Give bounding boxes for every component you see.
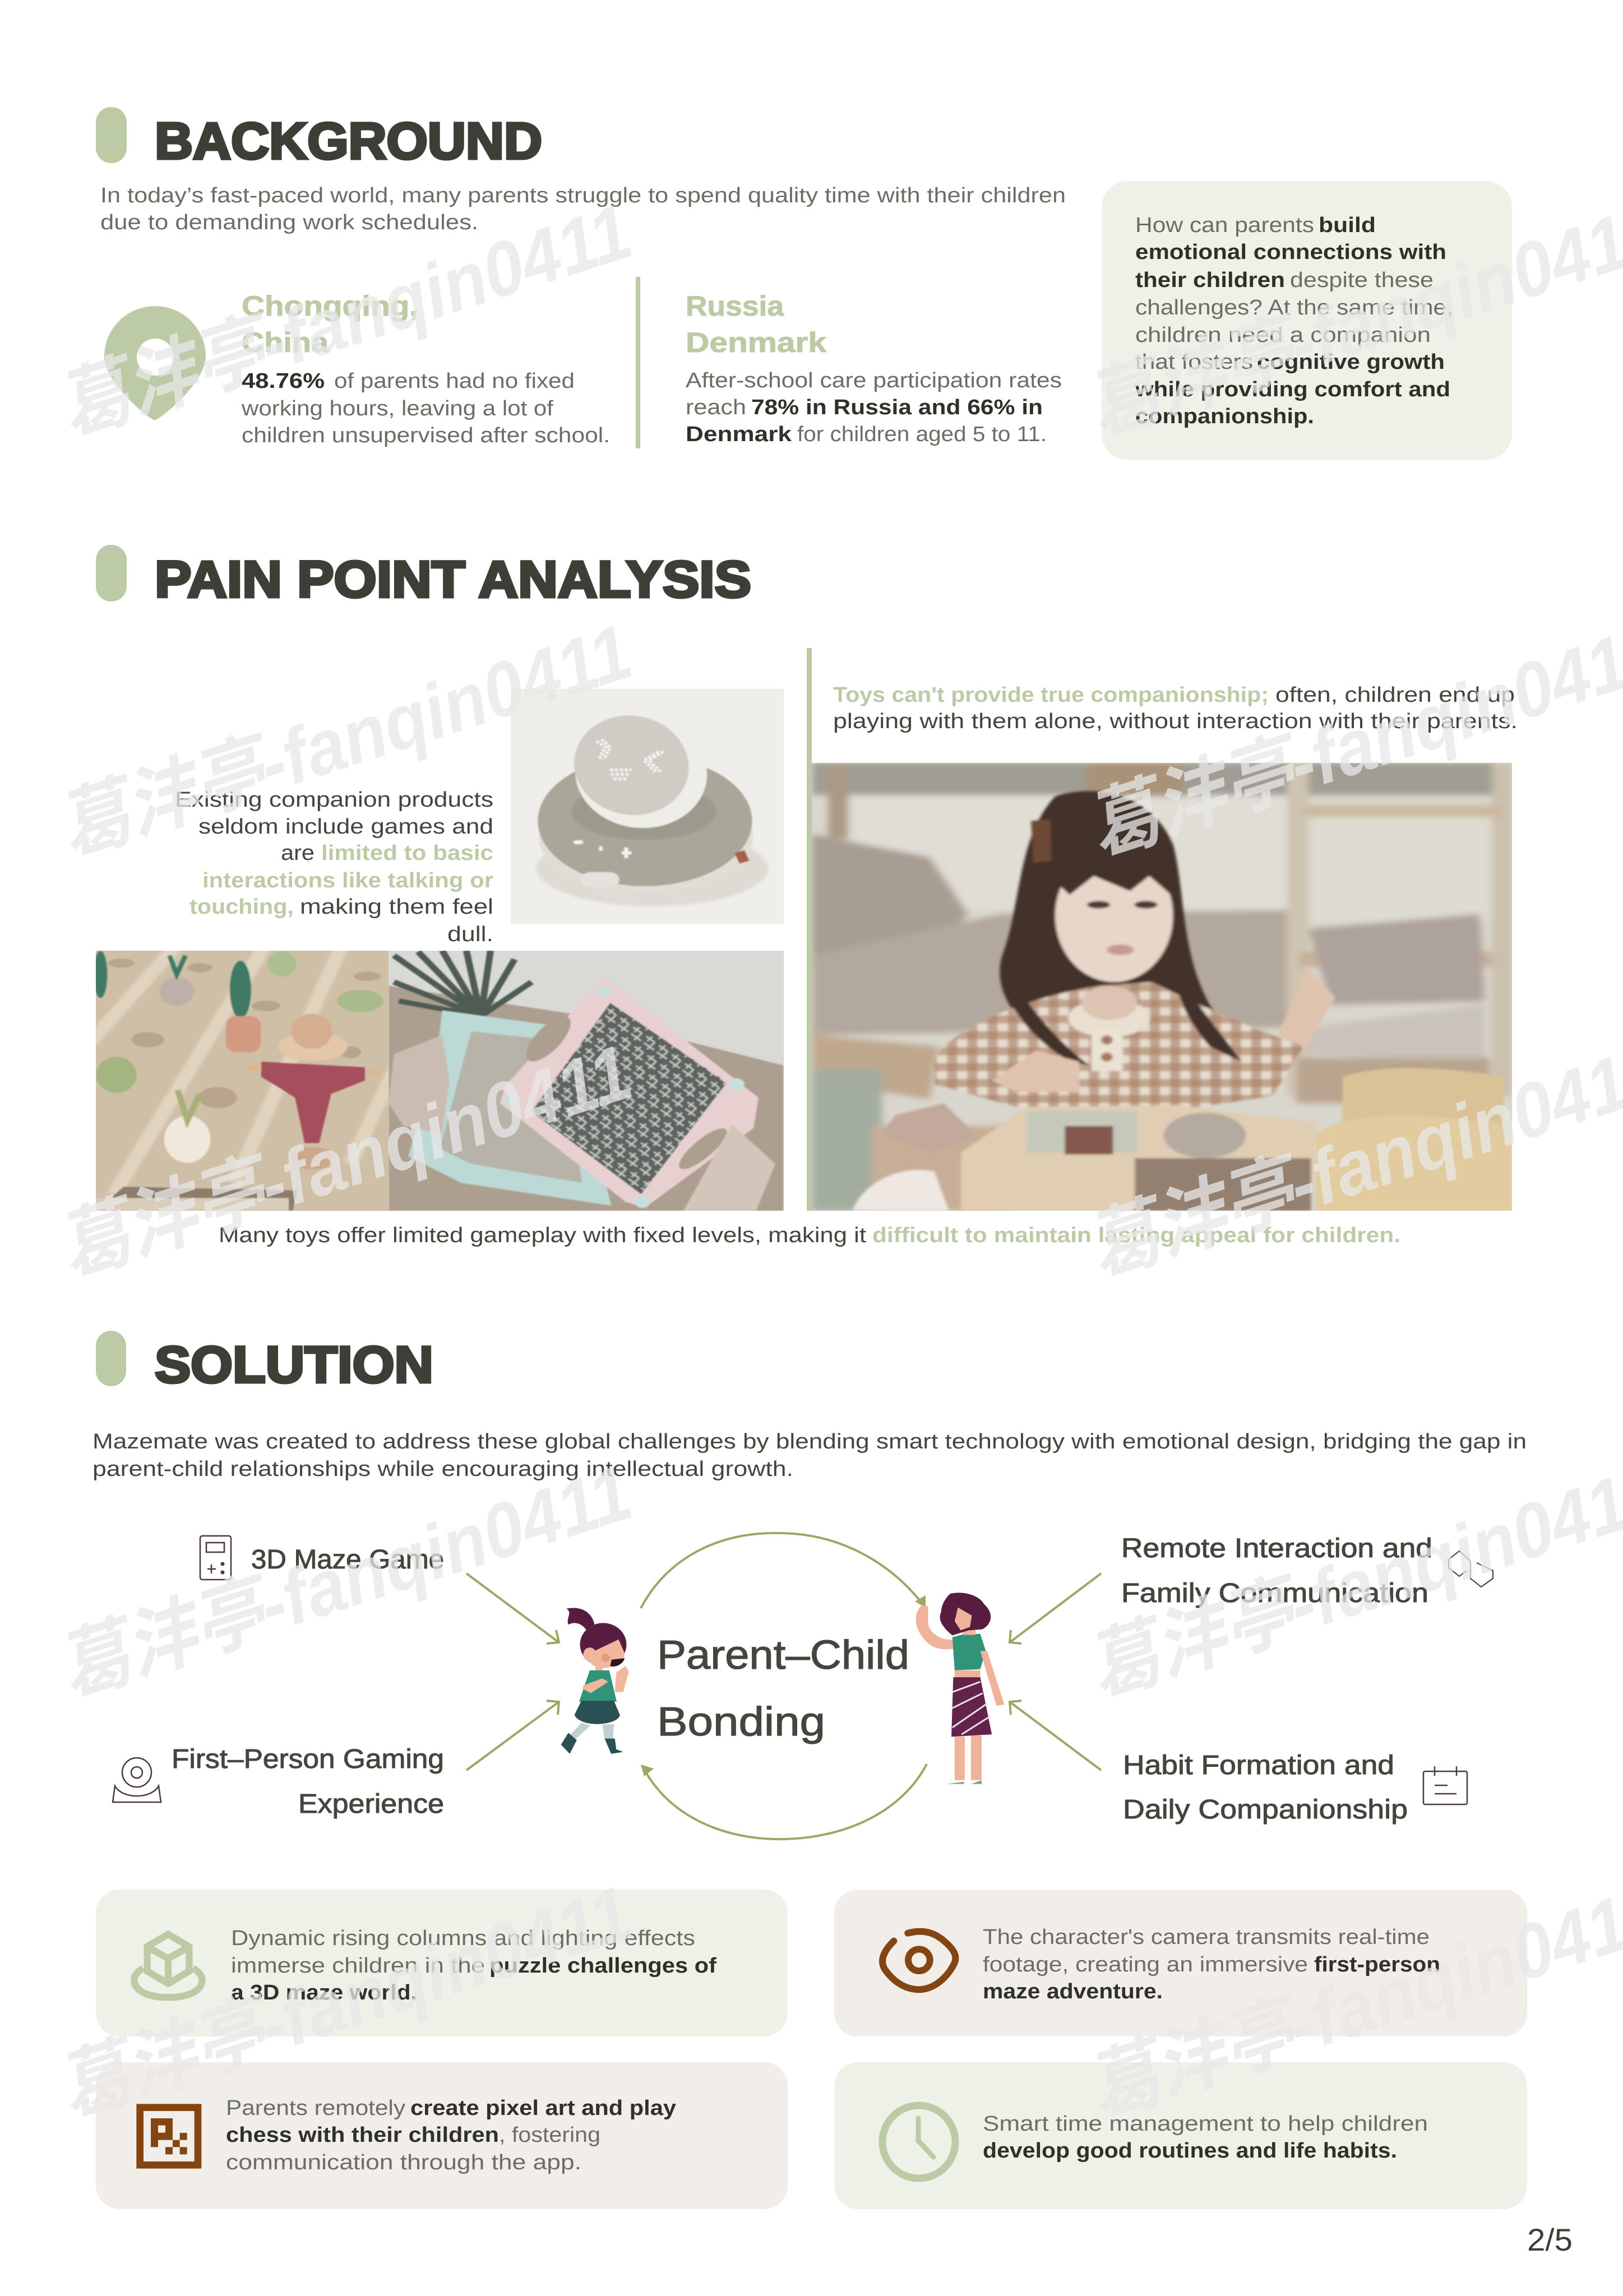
- stat block: Russia and Denmark: Denmark: [686, 423, 792, 446]
- panel: question callout: challenges? At the same time,: [1135, 296, 1453, 320]
- heading: background: BACKGROUND: [155, 113, 542, 170]
- stat block: Chongqing, China: Chongqing,: [242, 290, 418, 322]
- panel: 3D maze world: Dynamic rising columns and lighting effects: [231, 1927, 695, 1950]
- illustration: parent: [916, 1593, 1005, 1784]
- icon: eye: [882, 1932, 955, 1989]
- arrow: top arc to parent: [641, 1533, 926, 1608]
- heading: parent-child bonding: Parent–Child: [657, 1633, 909, 1678]
- panel: question callout: build: [1319, 214, 1376, 237]
- panel: question callout: children need a companion: [1135, 323, 1431, 347]
- panel: 3D maze world: [96, 1890, 788, 2036]
- panel: question callout: while providing comfort and: [1135, 378, 1450, 401]
- divider: vertical bar: [807, 648, 812, 1211]
- panel: question callout: cognitive growth: [1257, 350, 1445, 374]
- text: solution summary: parent-child relationships while encouraging intellectual growth.: [93, 1457, 793, 1481]
- intro text: In today’s fast-paced world, many parents struggle to spend quality time with their children: [100, 184, 1066, 207]
- label: Remote Interaction and Family Communication: Remote Interaction and: [1121, 1534, 1432, 1563]
- text: toys caption: [219, 1224, 1400, 1247]
- panel: question callout: that fosters: [1135, 350, 1253, 374]
- arrow: maze game to child: [466, 1573, 559, 1644]
- watermarks: 葛沣亭-fanqin0411: [48, 1449, 641, 1714]
- heading marker: background: [96, 107, 127, 163]
- label: Habit Formation and Daily Companionship: Habit Formation and: [1123, 1751, 1394, 1780]
- panel: pixel art and chess: , fostering: [499, 2123, 600, 2147]
- stat block: Chongqing, China: 48.76%: [242, 369, 325, 393]
- panel: pixel art and chess: chess with their children: [226, 2123, 499, 2147]
- panel: question callout: emotional connections with: [1135, 240, 1446, 264]
- stat block: Chongqing, China: of parents had no fixed: [334, 369, 575, 393]
- panel: question callout: companionship.: [1135, 405, 1314, 428]
- icon: webcam: [113, 1758, 161, 1802]
- intro text: [100, 184, 1066, 234]
- text: companion products: seldom include games and: [198, 815, 493, 839]
- panel: time management: [834, 2062, 1527, 2209]
- icon: calendar: [1423, 1766, 1467, 1804]
- section: background: [96, 107, 1512, 460]
- watermarks: 葛沣亭-fanqin0411: [48, 1869, 641, 2134]
- label: First-Person Gaming Experience: First–Person Gaming: [172, 1744, 444, 1774]
- text: companion products: interactions like talking or: [202, 869, 493, 892]
- panel: question callout: their children: [1135, 269, 1285, 292]
- page number: 2/5: [1527, 2222, 1573, 2257]
- arrow: habit formation to parent: [1010, 1701, 1101, 1770]
- text: solution summary: Mazemate was created to address these global challenges by blending smart technology with emotional design, bridging the gap in: [93, 1430, 1527, 1453]
- text: companion products: Existing companion products: [175, 788, 493, 812]
- divider: [636, 277, 640, 448]
- icon: handheld game: [200, 1536, 231, 1580]
- text: companionship: playing with them alone, without interaction with their parents.: [833, 710, 1518, 733]
- stat block: Russia and Denmark: After-school care participation rates: [686, 369, 1062, 392]
- panel: pixel art and chess: Parents remotely: [226, 2096, 405, 2120]
- text: companionship: [833, 683, 1518, 733]
- panel: pixel art and chess: communication through the app.: [226, 2151, 581, 2174]
- panel: question callout: How can parents: [1135, 214, 1314, 237]
- text: companionship: often, children end up: [1275, 683, 1515, 707]
- label: 3D Maze Game: 3D Maze Game: [251, 1545, 444, 1575]
- label: Remote Interaction and Family Communication: Family Communication: [1121, 1578, 1428, 1608]
- watermarks: 葛沣亭-fanqin0411: [48, 608, 641, 873]
- text: companion products: making them feel: [300, 895, 493, 919]
- heading: parent-child bonding: Bonding: [657, 1700, 825, 1744]
- text: companion products: [175, 788, 493, 946]
- text: companionship: Toys can't provide true companionship;: [833, 683, 1269, 707]
- arrow: remote interaction to parent: [1010, 1573, 1101, 1644]
- text: toys caption: difficult to maintain lasting appeal for children.: [872, 1224, 1400, 1247]
- icon: location pin: [104, 306, 206, 420]
- illustration: child: [561, 1608, 629, 1754]
- intro text: due to demanding work schedules.: [100, 211, 478, 234]
- label: Habit Formation and Daily Companionship: Daily Companionship: [1123, 1795, 1408, 1825]
- stat block: Chongqing, China: working hours, leaving a lot of: [241, 397, 553, 420]
- panel: question callout: [1102, 181, 1512, 460]
- stat block: Russia and Denmark: 78% in Russia and 66% in: [751, 396, 1043, 419]
- panel: first-person camera: first-person: [1314, 1953, 1440, 1976]
- panel: 3D maze world: immerse children in the: [231, 1954, 485, 1978]
- text: toys caption: Many toys offer limited gameplay with fixed levels, making it: [219, 1224, 867, 1247]
- panel: first-person camera: The character's camera transmits real-time: [983, 1925, 1430, 1949]
- heading marker: solution: [96, 1331, 126, 1386]
- icon: pixel art: [136, 2104, 201, 2169]
- text: companion products: limited to basic: [321, 841, 493, 865]
- stat block: Chongqing, China: [241, 290, 610, 447]
- stat block: Russia and Denmark: Russia: [686, 290, 784, 322]
- icon: linked hexagons: [1449, 1551, 1493, 1587]
- stat block: Chongqing, China: China: [242, 327, 329, 358]
- photo: vegetable toy board: [90, 948, 404, 1211]
- heading: parent-child bonding: [657, 1633, 909, 1744]
- section: pain point analysis: [90, 545, 1518, 1247]
- text: companion products: touching,: [189, 895, 294, 919]
- heading: pain point analysis: PAIN POINT ANALYSIS: [155, 551, 751, 608]
- panel: time management: Smart time management to help children: [983, 2112, 1428, 2136]
- stat block: Russia and Denmark: [686, 290, 1062, 446]
- panel: pixel art and chess: [96, 2062, 788, 2209]
- stat block: Russia and Denmark: reach: [686, 396, 746, 419]
- text: companion products: dull.: [447, 923, 493, 946]
- label: First-Person Gaming Experience: [172, 1744, 444, 1819]
- icon: clock: [882, 2105, 955, 2178]
- stat block: Russia and Denmark: for children aged 5 to 11.: [797, 423, 1047, 446]
- heading: solution: SOLUTION: [155, 1336, 433, 1394]
- text: solution summary: [93, 1430, 1527, 1481]
- panel: 3D maze world: a 3D maze world.: [231, 1981, 417, 2005]
- stat block: Chongqing, China: children unsupervised after school.: [242, 424, 610, 447]
- panel: 3D maze world: puzzle challenges of: [489, 1954, 716, 1978]
- text: companion products: are: [281, 841, 315, 865]
- label: Habit Formation and Daily Companionship: [1123, 1751, 1408, 1825]
- icon: cube on platform: [134, 1934, 202, 1997]
- heading marker: pain point analysis: [96, 545, 127, 601]
- photo: maze toy: [389, 951, 784, 1211]
- panel: first-person camera: footage, creating an immersive: [983, 1953, 1308, 1976]
- arrow: first-person gaming to child: [466, 1701, 559, 1770]
- panel: pixel art and chess: create pixel art and play: [410, 2096, 676, 2120]
- photo: companion robot: [511, 689, 784, 924]
- section: solution: [93, 1331, 1573, 2257]
- panel: first-person camera: maze adventure.: [983, 1980, 1163, 2003]
- label: First-Person Gaming Experience: Experience: [298, 1789, 444, 1819]
- panel: first-person camera: [834, 1890, 1527, 2036]
- watermarks: 葛沣亭-fanqin0411: [48, 1029, 641, 1293]
- label: Remote Interaction and Family Communication: [1121, 1534, 1432, 1608]
- stat block: Russia and Denmark: Denmark: [686, 327, 826, 358]
- photo: girl playing alone: [812, 763, 1512, 1211]
- watermarks: 葛沣亭-fanqin0411: [48, 188, 641, 452]
- panel: question callout: despite these: [1290, 269, 1434, 292]
- arrow: bottom arc to child: [641, 1764, 927, 1839]
- subject: [853, 791, 1512, 1211]
- panel: time management: develop good routines and life habits.: [983, 2139, 1397, 2163]
